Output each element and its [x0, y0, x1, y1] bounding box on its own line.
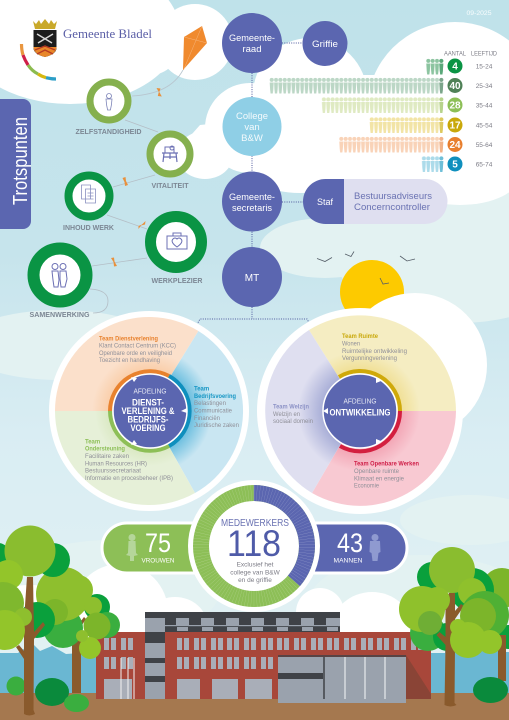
- org: Gemeenteraad: [222, 13, 282, 73]
- org: MT: [222, 247, 282, 307]
- bush right: [473, 677, 508, 703]
- team Ruimte: Wonen: [342, 342, 360, 348]
- row 65-74: [422, 156, 493, 172]
- date: 09-2025: [466, 10, 492, 17]
- org: College van B&W: [222, 97, 282, 156]
- tree right: [399, 547, 509, 706]
- crest: [33, 19, 57, 57]
- pill: mannen: 43: [337, 528, 363, 558]
- trotspunt: Inhoud werk: [63, 176, 115, 232]
- department circle: [323, 371, 400, 451]
- row 55-64: 55-64: [476, 142, 493, 149]
- trotspunt: Samenwerking: [30, 248, 90, 319]
- icon: woman: [126, 534, 138, 561]
- org: Staf: Staf: [317, 197, 333, 208]
- team Bedrijfsvoering: Financiën: [194, 416, 220, 422]
- donut: medewerkers: MEDEWERKERS: [221, 518, 289, 529]
- org: Gemeentesecretaris: [222, 172, 282, 232]
- team Ruimte: Ruimtelijke ontwikkeling: [342, 349, 407, 355]
- tree left: [0, 526, 70, 716]
- row 45-54: 17: [449, 120, 461, 132]
- tree far right: [482, 568, 509, 681]
- icon: man: [370, 534, 380, 561]
- org: College van B&W: B&W: [241, 133, 263, 144]
- connector lines between trotspunten: [90, 120, 158, 313]
- org: Staf: Bestuursadviseurs: [354, 191, 432, 202]
- team Ondersteuning: Bestuurssecretariaat: [85, 468, 141, 474]
- team Ruimte: Team Ruimte: [342, 334, 379, 340]
- org: College van B&W: van: [244, 122, 260, 133]
- pill: mannen: [310, 523, 407, 573]
- skyline: [0, 643, 509, 697]
- name: Gemeente Bladel: [63, 26, 152, 41]
- sun: [340, 260, 404, 324]
- row 15-24: 4: [452, 62, 458, 72]
- pill: vrouwen: 75: [145, 528, 171, 558]
- icon: two people: [52, 264, 67, 287]
- team Ondersteuning: Ondersteuning: [85, 446, 125, 452]
- org: Gemeentesecretaris: Gemeente-: [229, 192, 275, 203]
- row 65-74: 65-74: [476, 162, 493, 168]
- trotspunt: Werkplezier: [150, 216, 203, 285]
- team Welzijn: Welzijn en: [273, 412, 300, 418]
- donut: medewerkers: college van B&W: [230, 570, 281, 576]
- team Dienstverlening: Openbare orde en veiligheid: [99, 351, 172, 357]
- org: College van B&W: College: [236, 111, 268, 122]
- logo arc: [22, 44, 56, 79]
- team Ondersteuning: Informatie en procesbeheer (IPB): [85, 476, 173, 482]
- tab: Trotspunten: Trotspunten: [10, 117, 32, 205]
- age chart: LEEFTIJD: [471, 52, 498, 58]
- team Dienstverlening: Team Dienstverlening: [99, 336, 158, 342]
- team Openbare Werken: [354, 462, 419, 490]
- team Ondersteuning: Human Resources (HR): [85, 462, 147, 468]
- org: Gemeentesecretaris: secretaris: [232, 203, 272, 214]
- org: Gemeenteraad: raad: [242, 44, 262, 55]
- team Bedrijfsvoering: Juridische zaken: [194, 423, 239, 429]
- donut: medewerkers: Exclusief het: [237, 562, 274, 568]
- flagpoles: [121, 658, 134, 705]
- pie: Dienstverlening en Bedrijfsvoering: [55, 317, 243, 505]
- pill: mannen: MANNEN: [334, 558, 363, 564]
- department circle: AFDELING: [134, 388, 166, 396]
- pill: vrouwen: VROUWEN: [142, 558, 175, 564]
- row 65-74: 5: [452, 160, 458, 170]
- trotspunt: Samenwerking: SAMENWERKING: [30, 310, 90, 319]
- department circle: AFDELING: [344, 398, 376, 406]
- row 55-64: 24: [449, 140, 461, 151]
- team Ruimte: Vergunningverlening: [342, 356, 397, 362]
- row 25-34: [270, 78, 493, 94]
- column headings: AANTAL: [444, 52, 467, 58]
- kite: [132, 26, 207, 96]
- org: Staf: Concerncontroller: [354, 202, 430, 213]
- trotspunt: Zelfstandigheid: ZELFSTANDIGHEID: [76, 127, 142, 136]
- team Bedrijfsvoering: Team: [194, 386, 209, 392]
- org: Staf: [303, 179, 448, 224]
- row 45-54: [370, 117, 493, 133]
- team Ruimte: [342, 334, 407, 362]
- department circle: VERLENING &: [122, 406, 175, 416]
- org: MT: MT: [245, 273, 259, 284]
- building: [96, 612, 431, 705]
- icon: desk: [162, 153, 178, 162]
- age chart: [270, 52, 498, 172]
- department circle: ONTWIKKELING: [330, 408, 390, 418]
- trotspunt: Vitaliteit: [150, 134, 190, 190]
- row 15-24: [426, 58, 493, 74]
- trotspunt: Vitaliteit: VITALITEIT: [152, 181, 189, 190]
- row 35-44: [322, 97, 493, 113]
- birds: [317, 252, 415, 284]
- tab: Trotspunten: [0, 99, 32, 229]
- row 55-64: [339, 136, 493, 152]
- upper window rows: [104, 638, 423, 699]
- pie: Ontwikkeling: [265, 315, 456, 506]
- department circle: DIENST-: [132, 398, 164, 408]
- team Openbare Werken: Team Openbare Werken: [354, 462, 419, 468]
- team Openbare Werken: Klimaat en energie: [354, 476, 405, 482]
- tree middle left: [36, 567, 120, 693]
- department circle: VOERING: [130, 423, 166, 433]
- team Openbare Werken: Economie: [354, 484, 380, 490]
- team Bedrijfsvoering: [194, 386, 239, 429]
- penthouse windows: [165, 618, 340, 631]
- team Dienstverlening: Klant Contact Centrum (KCC): [99, 344, 176, 350]
- logo: Gemeente Bladel: [22, 19, 152, 79]
- team Welzijn: Team Welzijn: [273, 404, 309, 410]
- glass entrance: [278, 657, 406, 703]
- donut: medewerkers: [188, 480, 320, 612]
- row 25-34: 40: [449, 81, 461, 92]
- ground: [0, 693, 509, 720]
- trotspunt: Inhoud werk: INHOUD WERK: [63, 223, 115, 232]
- trotspunt: Werkplezier: WERKPLEZIER: [152, 276, 203, 285]
- pill: vrouwen: [102, 523, 195, 573]
- row 15-24: 15-24: [476, 64, 493, 70]
- org: Griffie: [302, 21, 348, 66]
- team Ondersteuning: Facilitaire zaken: [85, 454, 129, 460]
- org: Gemeenteraad: Gemeente-: [229, 33, 275, 44]
- donut: medewerkers: 118: [227, 523, 281, 564]
- row 45-54: 45-54: [476, 122, 493, 130]
- org: Griffie: Griffie: [312, 39, 338, 50]
- pale clouds: [0, 167, 509, 645]
- row 25-34: 25-34: [476, 83, 493, 90]
- team Ondersteuning: [85, 440, 173, 482]
- org connector lines: [168, 43, 338, 377]
- icon: briefcase with heart: [167, 233, 187, 249]
- trotspunt: Zelfstandigheid: [76, 82, 142, 136]
- row 35-44: 35-44: [476, 102, 493, 110]
- team Bedrijfsvoering: Bedrijfsvoering: [194, 394, 236, 400]
- team Ondersteuning: Team: [85, 440, 100, 446]
- white rings behind pies: [49, 308, 463, 514]
- icon: documents: [82, 185, 96, 203]
- team Welzijn: [273, 404, 313, 425]
- bushes left: [6, 676, 89, 712]
- row 35-44: 28: [449, 100, 461, 112]
- team Dienstverlening: [99, 336, 176, 364]
- team Bedrijfsvoering: Belastingen: [194, 401, 226, 407]
- team Bedrijfsvoering: Communicatie: [194, 408, 233, 414]
- donut: medewerkers: en de griffie: [238, 577, 272, 584]
- department circle: BEDRIJFS-: [128, 414, 168, 424]
- icon: person: [106, 94, 112, 110]
- bows: [111, 88, 162, 266]
- team Dienstverlening: Toezicht en handhaving: [99, 358, 160, 364]
- team Welzijn: sociaal domein: [273, 419, 313, 425]
- team Openbare Werken: Openbare ruimte: [354, 469, 400, 475]
- department circle: [110, 371, 190, 451]
